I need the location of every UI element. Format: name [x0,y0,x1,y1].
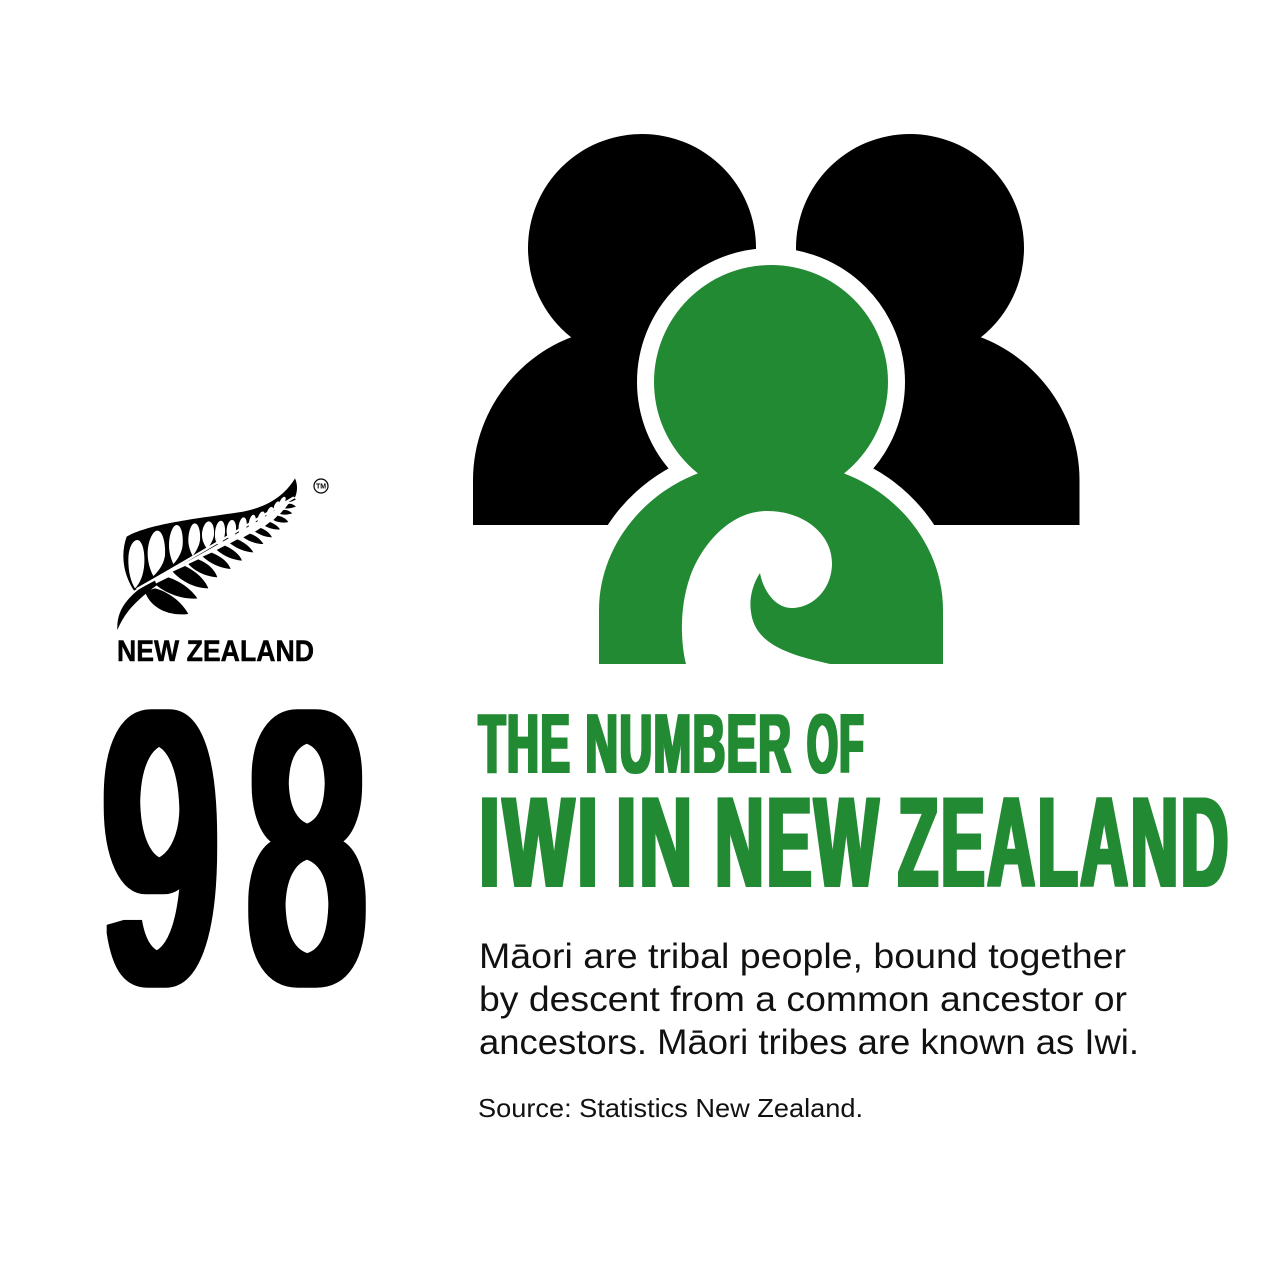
fern upper leaflet openings [128,496,287,588]
fern white midrib [137,497,294,589]
big number [103,634,366,1061]
heading line 1 [478,697,865,790]
logo wordmark: NEW ZEALAND [117,635,314,668]
source note: Source: Statistics New Zealand. [478,1093,863,1123]
icon: white koru spiral [682,511,832,664]
icon: trademark symbol: TM [316,484,326,491]
digit 8: 8 [248,634,366,1061]
heading line 1: NUMBER [586,697,792,790]
logo: New Zealand fern mark [117,478,328,668]
icon: green person [599,265,943,664]
heading line 2: NEW [715,771,881,913]
digit 9: 9 [103,634,218,1061]
heading line 2: IN [616,771,695,913]
fern stem [117,581,157,630]
icon: left black person [473,134,756,525]
icon: right black person [796,134,1080,525]
text: OF [807,697,865,790]
body text: ancestors. Māori tribes are known as Iwi. [479,1023,1139,1062]
body text [479,937,1139,1062]
heading line 2: IWI [479,771,601,913]
fern upper frond [123,478,297,591]
icon: white halo around green person [599,265,943,664]
body text: Māori are tribal people, bound together [479,937,1126,976]
icon: trademark symbol [314,479,328,493]
icon: silver fern [117,478,297,630]
body text: by descent from a common ancestor or [479,980,1127,1019]
icon: three people with koru [473,134,1080,664]
fern lower leaflets [145,498,296,614]
heading line 1: THE [478,697,572,790]
heading line 2 [479,771,1231,913]
